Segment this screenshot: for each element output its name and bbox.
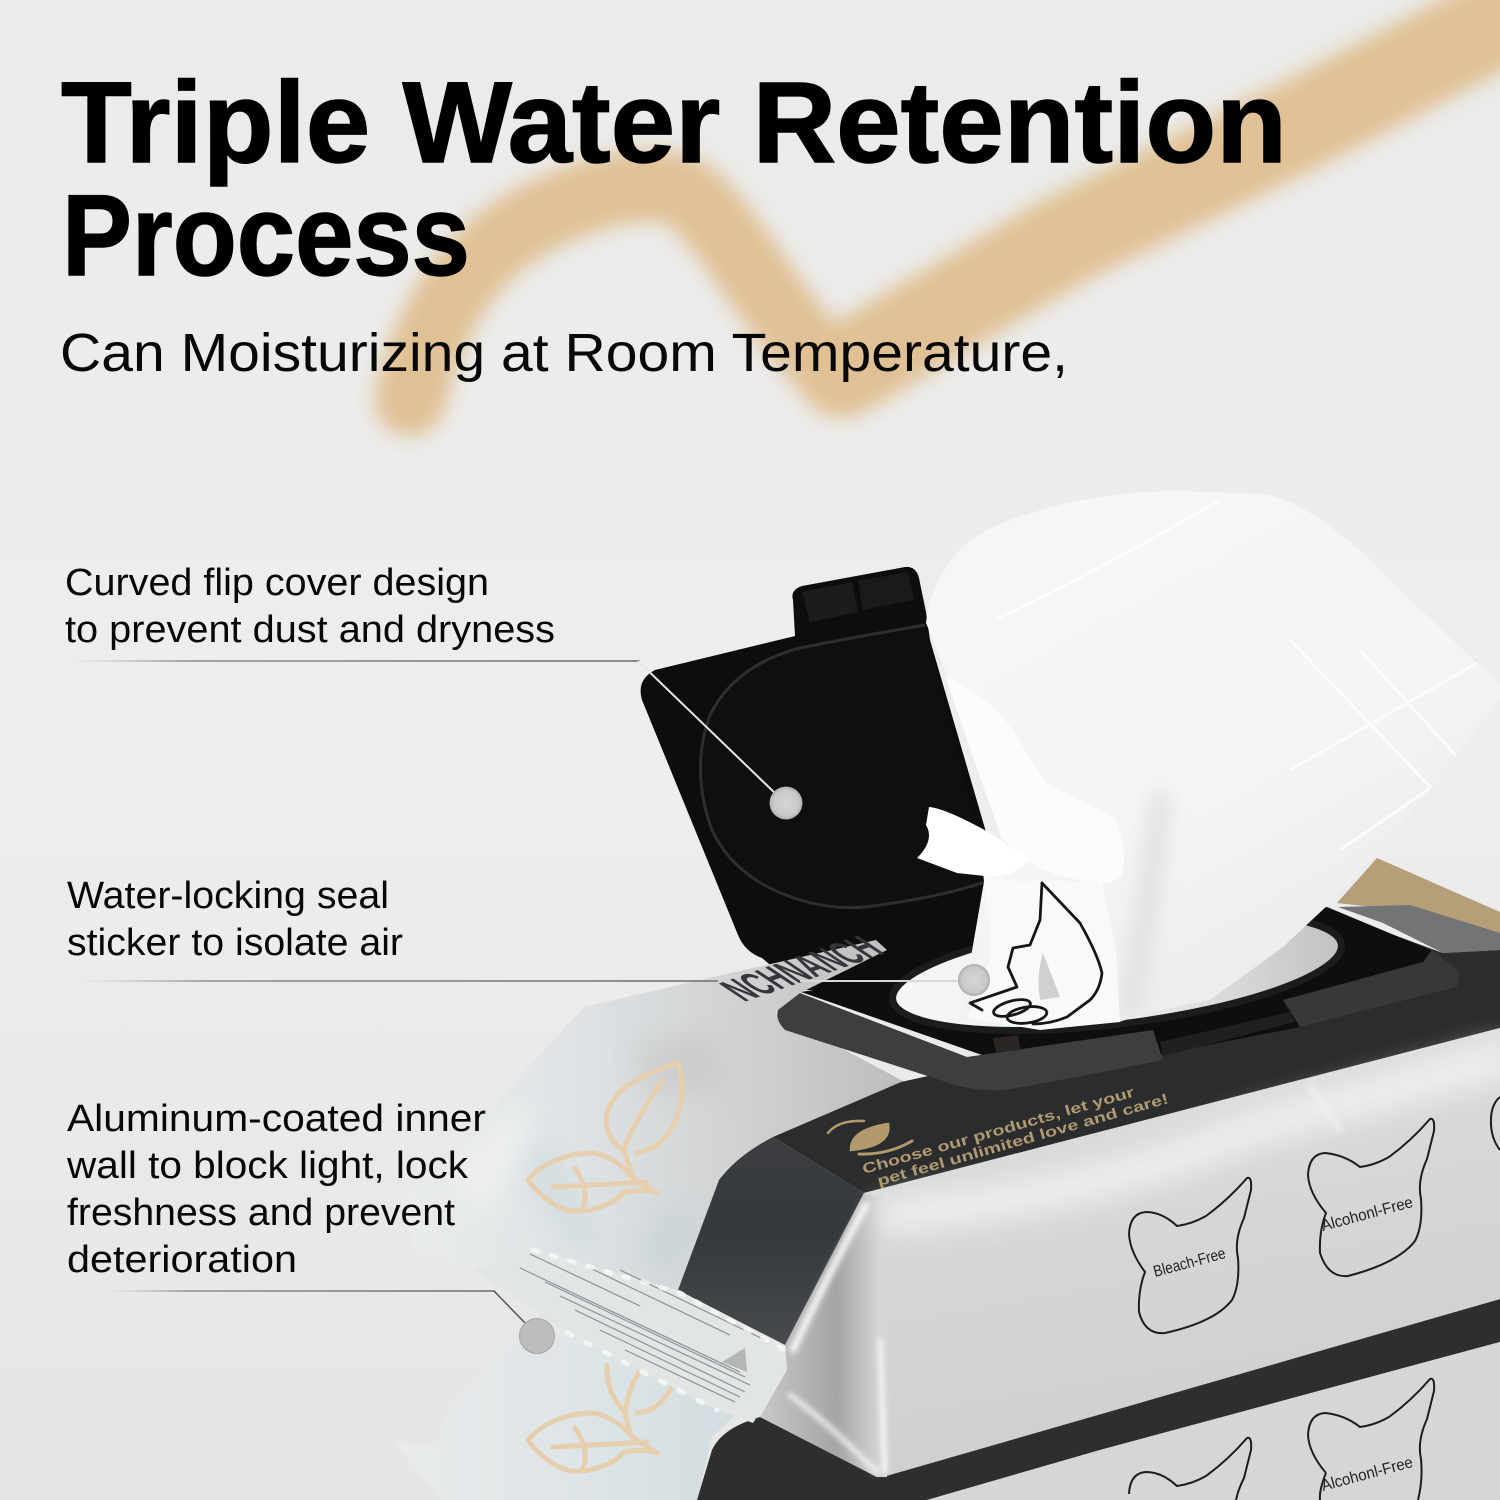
- label: wall to block light, lock: [66, 1145, 469, 1187]
- label: [65, 562, 555, 651]
- dark band on top: [773, 908, 1500, 1193]
- lower cat: alcohol-free: [1308, 1379, 1434, 1500]
- cat outline: alcohol-free: Alcohonl-Free: [1320, 1194, 1415, 1235]
- leader line: [70, 660, 778, 796]
- tagline with logo: [828, 1085, 1170, 1190]
- upper pack top surface: [400, 940, 905, 1290]
- silver front face: [833, 1028, 1500, 1477]
- fabric crease lines: [1290, 654, 1478, 851]
- tan brush stroke: [410, 0, 1500, 400]
- logo: [828, 1121, 912, 1154]
- stem: [967, 873, 1120, 1030]
- centre bar: [1160, 1012, 1295, 1056]
- wipe sheet: [917, 491, 1500, 1030]
- label: sticker to isolate air: [67, 922, 403, 964]
- lower silver face: [927, 1342, 1500, 1500]
- label: freshness and prevent: [67, 1192, 455, 1234]
- dark side face: [678, 1137, 864, 1345]
- right rim: [1283, 950, 1460, 1027]
- tagline with logo: Choose our products, let your: [861, 1085, 1137, 1178]
- lower dark face: [697, 1299, 1500, 1500]
- title: [61, 59, 1287, 300]
- callout 1: curved flip cover: [65, 562, 802, 820]
- marker dot: [958, 964, 990, 996]
- silver corner wedge: [760, 1193, 887, 1477]
- marker dot: [520, 1318, 554, 1354]
- marker dot: [770, 786, 802, 820]
- lower cat: bleach-free: [1129, 1438, 1251, 1500]
- leader line: [78, 980, 960, 982]
- back edge pieces: [1337, 858, 1500, 953]
- callout 2: water-locking seal: [67, 875, 990, 996]
- flip lid: [641, 567, 1000, 990]
- lower leaves: [528, 1350, 677, 1471]
- label: [67, 875, 403, 964]
- callout 3: aluminum-coated inner wall: [66, 1098, 554, 1354]
- label: [66, 1098, 486, 1281]
- cat outline: bleach-free: Bleach-Free: [1152, 1245, 1228, 1281]
- title: Process: [62, 172, 470, 300]
- wipe dispenser frame: [777, 893, 1460, 1090]
- soft fold shadow: [1130, 800, 1160, 1010]
- pet drawing: [970, 883, 1102, 1026]
- leaf motif: [528, 1063, 682, 1211]
- label: deterioration: [67, 1239, 297, 1281]
- cat outline: alcohol-free: [1308, 1119, 1434, 1276]
- curled corner: [917, 807, 1030, 877]
- tagline with logo: pet feel unlimited love and care!: [876, 1091, 1170, 1190]
- seal strip: [473, 1250, 787, 1423]
- label: Water-locking seal: [67, 875, 389, 917]
- lower clear seal end: [393, 1333, 735, 1500]
- silver fold highlights: [790, 1085, 1340, 1472]
- label: Aluminum-coated inner: [67, 1098, 486, 1140]
- title: Triple Water Retention: [61, 59, 1287, 187]
- front rim: [777, 993, 1163, 1090]
- leader line: [110, 1290, 527, 1325]
- lower cat: alcohol-free: Alcohonl-Free: [1320, 1454, 1415, 1495]
- lower pack: [393, 1299, 1500, 1500]
- clear end soft shading: [450, 1030, 730, 1280]
- brand name on pack: NCHNANCH: [709, 929, 895, 1008]
- subtitle: Can Moisturizing at Room Temperature,: [60, 323, 1068, 383]
- silver soft sheen: [895, 1060, 1500, 1215]
- cat outline: bleach-free: [1129, 1178, 1251, 1333]
- label: Curved flip cover design: [65, 562, 489, 604]
- oval opening: [886, 893, 1348, 1051]
- third cat edge: [1491, 1097, 1500, 1150]
- label: to prevent dust and dryness: [65, 609, 555, 651]
- product illustration: [504, 491, 1500, 1500]
- front flap: [945, 676, 1124, 883]
